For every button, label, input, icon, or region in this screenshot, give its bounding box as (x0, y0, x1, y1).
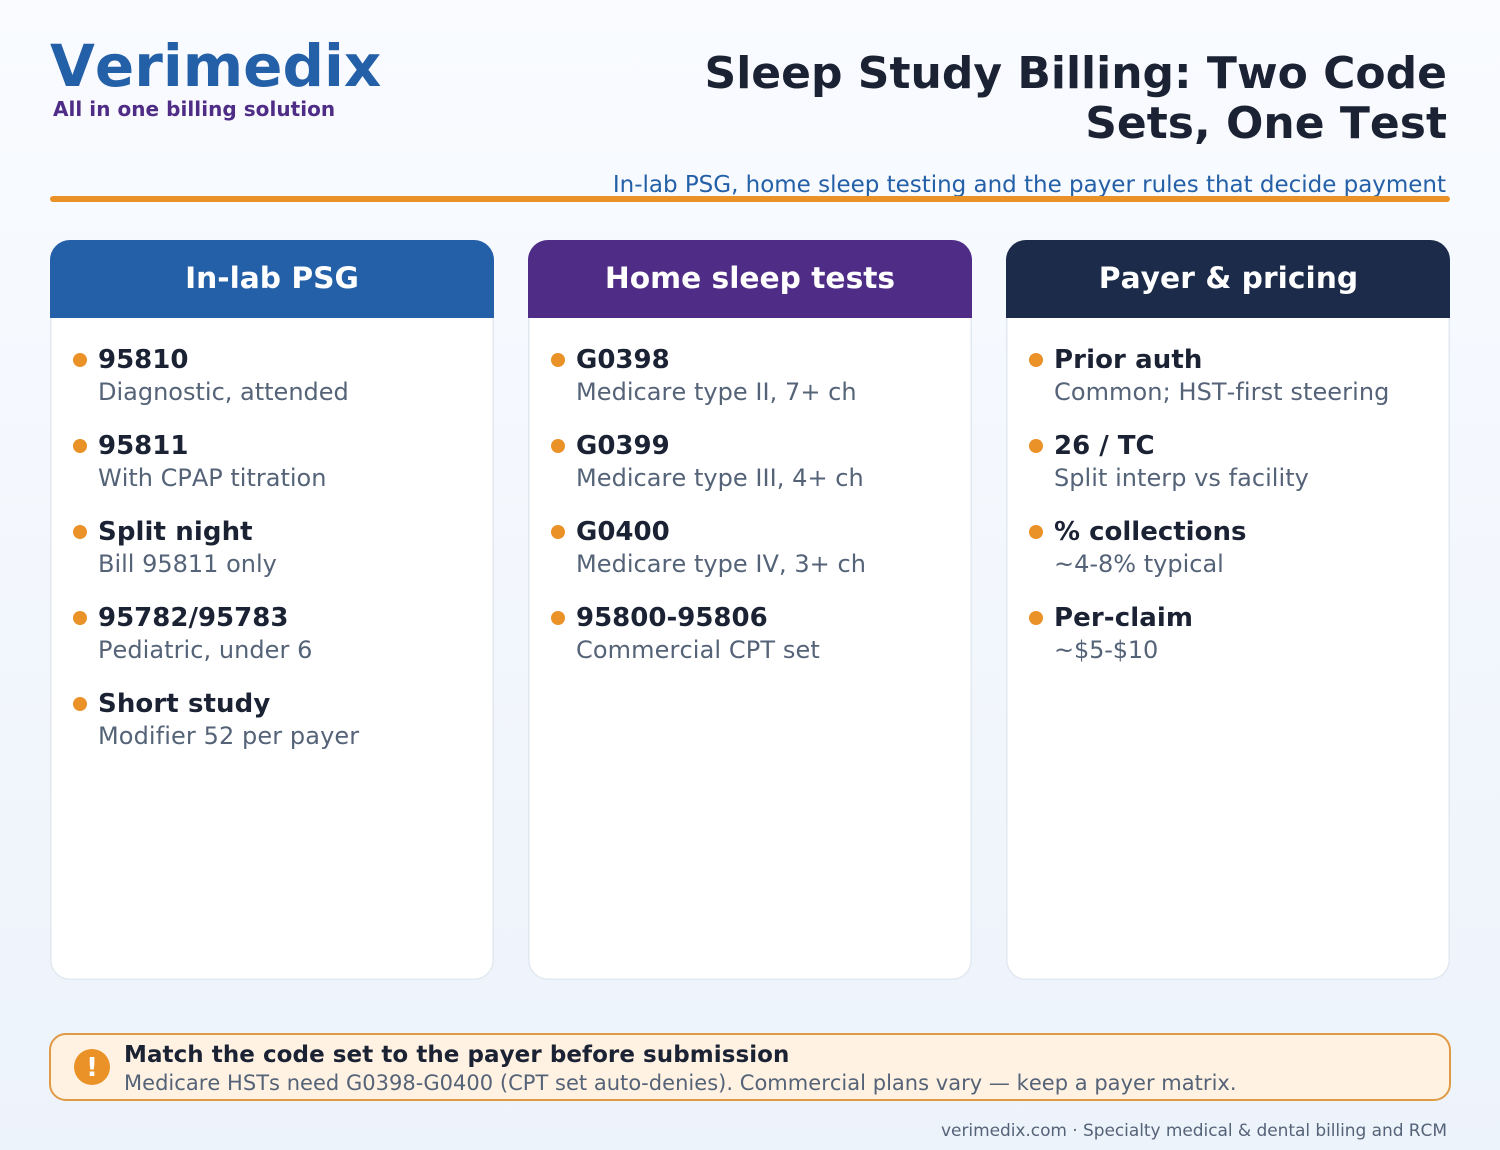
panel header: Home sleep tests: Home sleep tests (605, 261, 895, 296)
title: Sleep Study Billing: Two Code (705, 48, 1447, 99)
item: 95782/95783: 95782/95783 (98, 603, 288, 633)
item: G0399: G0399 (576, 431, 670, 461)
item: G0400: G0400 (576, 517, 670, 547)
panel: In-lab PSG (50, 240, 494, 979)
item: 95810: 95810 (98, 345, 188, 375)
item: 26 / TC: 26 / TC (1054, 431, 1155, 461)
panel header: Home sleep tests (528, 240, 972, 318)
item: Per-claim (1029, 603, 1193, 664)
item: Split night: Bill 95811 only (98, 550, 277, 578)
icon: warning: ! (86, 1053, 98, 1083)
item: 95811: With CPAP titration (98, 464, 326, 492)
footer: verimedix.com · Specialty medical & dental billing and RCM (941, 1121, 1447, 1141)
item: Short study (73, 689, 359, 750)
panel: Payer & pricing (1006, 240, 1450, 979)
panel header: Payer & pricing (1006, 240, 1450, 318)
title (705, 48, 1447, 149)
icon: warning (74, 1049, 110, 1085)
item: G0398: G0398 (576, 345, 670, 375)
item: 95782/95783 (73, 603, 312, 664)
title: Sets, One Test (1085, 98, 1447, 149)
item: 26 / TC (1029, 431, 1309, 492)
callout heading: Match the code set to the payer before submission (124, 1042, 789, 1068)
item: 95800-95806: 95800-95806 (576, 603, 768, 633)
item: G0399 (551, 431, 864, 492)
item: % collections (1029, 517, 1246, 578)
brand logo: Verimedix (50, 32, 381, 100)
item: G0398: Medicare type II, 7+ ch (576, 378, 857, 406)
item: % collections: ~4-8% typical (1054, 550, 1224, 578)
panel header: In-lab PSG: In-lab PSG (185, 261, 359, 296)
subtitle: In-lab PSG, home sleep testing and the payer rules that decide payment (613, 172, 1446, 198)
item: 95811 (73, 431, 326, 492)
item: Prior auth (1029, 345, 1389, 406)
item: G0398 (551, 345, 857, 406)
item: Prior auth: Prior auth (1054, 345, 1203, 375)
item: Short study: Short study (98, 689, 270, 719)
item: 95810 (73, 345, 349, 406)
item: G0399: Medicare type III, 4+ ch (576, 464, 864, 492)
callout (50, 1034, 1450, 1100)
item: Split night: Split night (98, 517, 253, 547)
brand tagline: All in one billing solution (53, 97, 335, 121)
panel header: In-lab PSG (50, 240, 494, 318)
item: Per-claim: Per-claim (1054, 603, 1193, 633)
item: Split night (73, 517, 277, 578)
item: 95800-95806 (551, 603, 820, 664)
item: Prior auth: Common; HST-first steering (1054, 378, 1389, 406)
item: G0400 (551, 517, 866, 578)
item: 95811: 95811 (98, 431, 188, 461)
item: 26 / TC: Split interp vs facility (1054, 464, 1309, 492)
item: 95800-95806: Commercial CPT set (576, 636, 820, 664)
panel: Home sleep tests (528, 240, 972, 979)
item: Short study: Modifier 52 per payer (98, 722, 359, 750)
item: 95810: Diagnostic, attended (98, 378, 349, 406)
item: G0400: Medicare type IV, 3+ ch (576, 550, 866, 578)
item: % collections: % collections (1054, 517, 1246, 547)
item: 95782/95783: Pediatric, under 6 (98, 636, 312, 664)
callout body: Medicare HSTs need G0398-G0400 (CPT set auto-denies). Commercial plans vary — keep a payer matrix. (124, 1071, 1237, 1095)
item: Per-claim: ~$5-$10 (1054, 636, 1158, 664)
panel header: Payer & pricing: Payer & pricing (1099, 261, 1358, 296)
